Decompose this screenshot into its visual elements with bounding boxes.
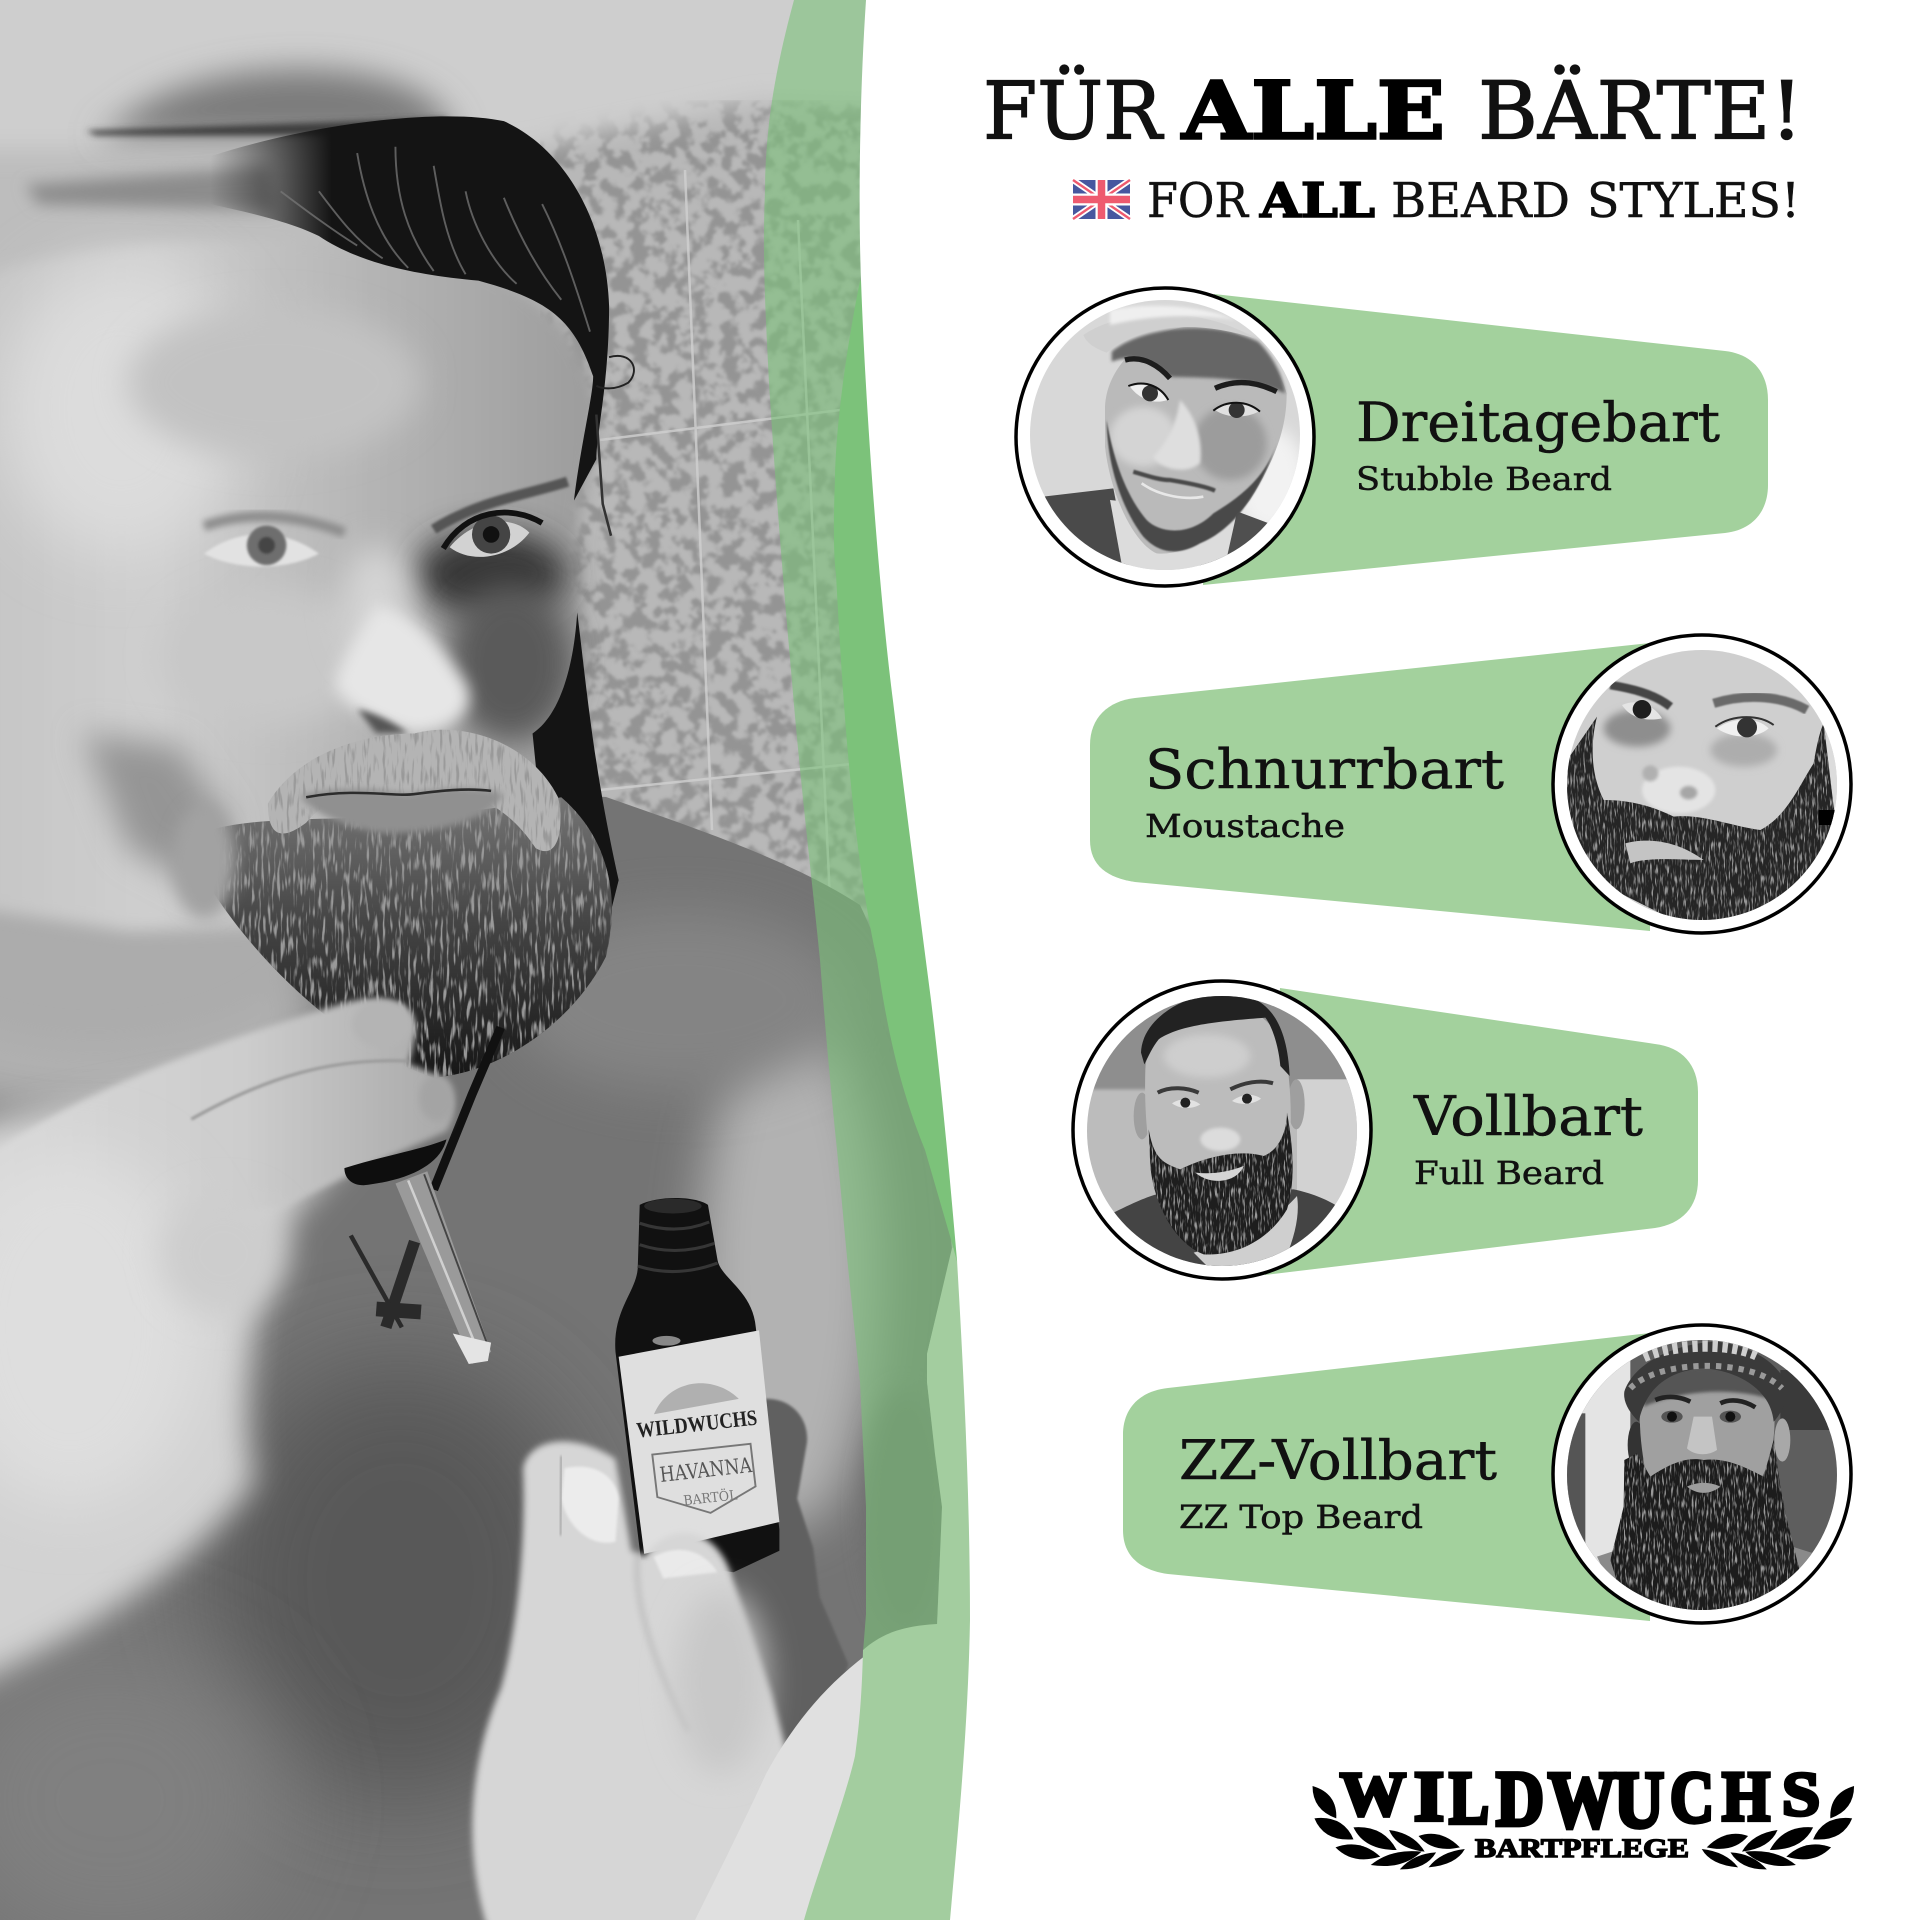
right eye socket and cheek [415, 529, 568, 619]
panel: Vollbart [1067, 976, 1698, 1286]
nose [335, 545, 469, 733]
bottle label text: HAVANNA [658, 1453, 754, 1488]
tagline: BARTPFLEGE [1475, 1834, 1689, 1863]
banner [1265, 988, 1698, 1275]
left eye [204, 516, 344, 567]
pipette [344, 1139, 491, 1364]
wordmark: C [1670, 1757, 1714, 1838]
label English: Full Beard [1414, 1154, 1604, 1192]
neck cord [434, 1027, 501, 1190]
banner [1123, 1333, 1650, 1621]
right eye [434, 482, 568, 557]
banner [1090, 643, 1650, 931]
chest [0, 780, 952, 1920]
label: Dreitagebart [1356, 391, 1720, 454]
curved panel: bright green band [834, 250, 980, 1265]
panel: Schnurrbart [1090, 630, 1857, 940]
label English: Moustache [1145, 807, 1345, 845]
bottle label text: WILDWUCHS [635, 1405, 758, 1443]
label English: ZZ Top Beard [1179, 1498, 1423, 1536]
lips [300, 788, 504, 833]
subtitle: FOR [1147, 173, 1250, 229]
curved panel: light grey corner [695, 1655, 870, 1920]
hair [210, 116, 634, 536]
right beard band [532, 612, 619, 908]
label: ZZ-Vollbart [1179, 1429, 1497, 1492]
pendant [351, 1235, 421, 1327]
title [983, 64, 1803, 158]
wordmark: H [1722, 1757, 1770, 1836]
label English: Stubble Beard [1356, 460, 1612, 498]
wordmark: S [1782, 1760, 1820, 1828]
hand fingers [22, 994, 457, 1198]
laurel left [1313, 1786, 1465, 1869]
lower hand [472, 1441, 791, 1920]
panel: ZZ-Vollbart [1123, 1320, 1857, 1630]
title: FÜR [983, 64, 1165, 158]
subtitle: STYLES! [1587, 173, 1800, 229]
thumb behind bottle [732, 1398, 848, 1743]
wordmark: D [1496, 1756, 1544, 1842]
faded hair smear [96, 69, 459, 140]
lower beard [214, 797, 612, 1078]
wordmark: W [1548, 1755, 1616, 1845]
wordmark: L [1449, 1757, 1489, 1840]
head [0, 69, 634, 1078]
title: BÄRTE! [1478, 64, 1803, 158]
label: Vollbart [1413, 1085, 1643, 1148]
hand mass [0, 1082, 357, 1695]
subtitle: ALL [1259, 173, 1375, 229]
left faded beard [83, 733, 230, 893]
curved panel: translucent green band [764, 0, 980, 1652]
hands and bottle [0, 998, 848, 1920]
photo: man applying beard oil [0, 0, 980, 1920]
portrait: ZZ top beard [1547, 1320, 1857, 1630]
subtitle [1147, 173, 1800, 229]
wordmark: U [1614, 1755, 1664, 1845]
portrait: moustache [1547, 630, 1857, 940]
wordmark: W [1340, 1760, 1406, 1828]
white right page [860, 0, 1920, 1920]
label: Schnurrbart [1145, 738, 1504, 801]
bottle label text: BARTÖL [682, 1487, 738, 1509]
curved panel: bottom light green [804, 1622, 980, 1920]
subtitle: BEARD [1391, 173, 1570, 229]
icon: UK flag [1073, 180, 1130, 219]
top band [0, 0, 900, 150]
wordmark: I [1414, 1757, 1444, 1836]
title: ALLE [1181, 64, 1445, 158]
portrait: stubble beard [1010, 280, 1320, 590]
panel: Dreitagebart [1010, 280, 1768, 590]
laurel right [1702, 1786, 1854, 1869]
banner [1203, 294, 1768, 585]
bottle label text [636, 1383, 757, 1514]
logo: Wildwuchs Bartpflege [1313, 1755, 1854, 1869]
moustache [268, 730, 560, 851]
portrait: full beard [1067, 976, 1377, 1286]
tile wall [540, 100, 890, 960]
curved panel: solid light green right of body [927, 1240, 980, 1627]
wordmark [1340, 1755, 1820, 1845]
bottle [615, 1198, 779, 1572]
